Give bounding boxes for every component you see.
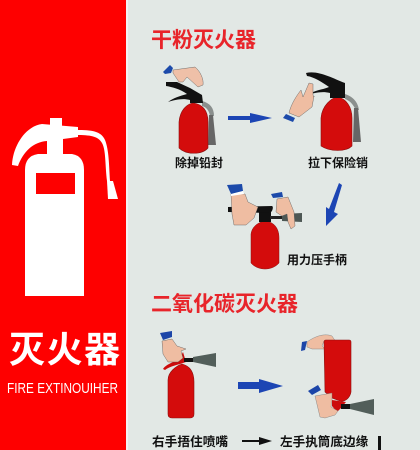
icon: extinguisher [228,206,302,269]
heading: dry powder extinguisher: 干粉灭火器 [151,29,256,52]
icon: extinguisher [306,72,361,150]
icon: extinguisher label window [36,173,75,194]
heading: CO2 extinguisher: 二氧化碳灭火器 [151,293,298,316]
icon: hand [160,331,186,362]
caption: 除掉铅封 [175,155,223,170]
icon: upper hand [301,335,336,351]
icon: extinguisher [166,82,216,153]
icon: white fire extinguisher [12,118,118,296]
caption: 右手捂住喷嘴 [152,434,228,449]
heading: 灭火器: 灭火器 [9,329,122,370]
panel: red sign [0,0,128,450]
caption: fire extinguisher: FIRE EXTINOUIHER [7,380,118,397]
icon: extinguisher [163,352,216,418]
icon: hand [163,65,203,87]
icon: left hand [227,184,258,225]
icon: right hand [271,192,295,229]
caption: 左手执筒底边缘 [280,434,369,449]
caption: 用力压手柄 [287,252,347,267]
arrow: step 4 to 5 [238,379,283,393]
icon: lower hand [308,385,338,418]
step 1: remove seal [163,65,223,170]
step 5: hold base [280,335,374,449]
icon: inverted extinguisher [324,340,374,415]
arrow: step 1 to 2 [228,113,272,123]
divider: black bar [378,436,381,450]
caption: 拉下保险销 [308,155,368,170]
arrow: step 2 to 3 [326,183,342,226]
step 3: press handle [227,184,347,269]
step 4: hold nozzle [152,331,228,449]
arrow: caption black arrow [242,437,272,445]
step 2: pull pin [283,72,368,170]
icon: hand [283,83,314,122]
